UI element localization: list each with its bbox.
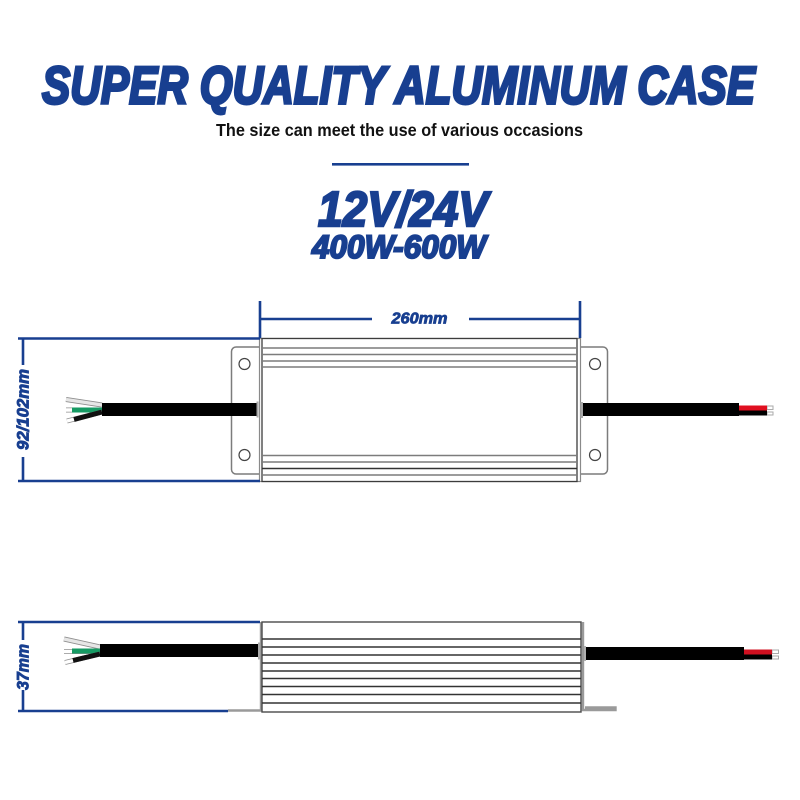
subtitle: The size can meet the use of various occasions bbox=[216, 120, 583, 140]
heading divider bbox=[332, 163, 469, 166]
right mounting flange bbox=[580, 347, 608, 474]
height dimension: 37mm: 37mm bbox=[14, 644, 32, 690]
height dimension: 92/102mm: 92/102mm bbox=[14, 369, 32, 450]
voltage heading: 12V/24V bbox=[318, 183, 492, 237]
height dimension: 92/102mm bbox=[14, 338, 260, 481]
left cable with three wires bbox=[66, 400, 258, 421]
left mounting flange bbox=[232, 347, 259, 474]
top view: power supply bbox=[66, 338, 773, 482]
aluminum case body bbox=[260, 338, 580, 482]
width dimension: 260mm bbox=[260, 301, 580, 338]
left cable with three wires bbox=[64, 639, 260, 662]
width dimension: 260mm: 260mm bbox=[390, 310, 448, 328]
wattage heading: 400W-600W bbox=[311, 229, 489, 265]
side flanges bbox=[228, 622, 616, 710]
right cable with two wires bbox=[584, 646, 778, 661]
finned case body bbox=[262, 622, 581, 712]
height dimension: 37mm bbox=[14, 622, 260, 711]
right cable with two wires bbox=[580, 402, 773, 418]
side view: power supply bbox=[64, 622, 778, 712]
